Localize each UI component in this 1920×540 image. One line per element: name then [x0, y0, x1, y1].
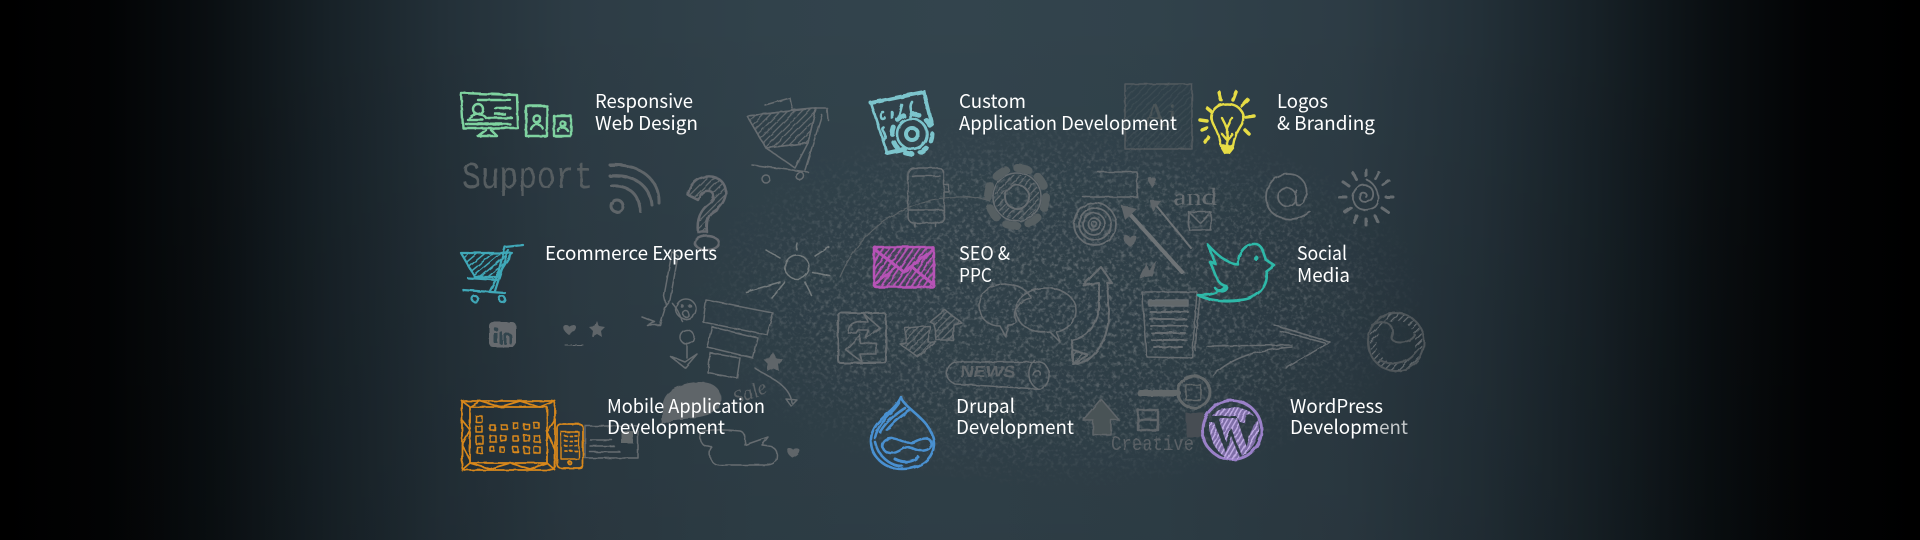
label: Development: [1290, 413, 1408, 440]
label: PPC: [959, 261, 992, 288]
service: logos and branding: [1200, 87, 1375, 153]
doodle: open box: [1083, 172, 1137, 197]
icon: teal shopping cart: [461, 245, 523, 302]
doodle: spiral sun: [1339, 170, 1393, 225]
doodle: long arrow: [1207, 325, 1330, 375]
label: [1297, 239, 1350, 288]
label: Drupal: [956, 392, 1015, 419]
label: Ecommerce Experts: [545, 239, 717, 266]
label: [959, 239, 1010, 288]
doodle: info card: [585, 426, 638, 458]
doodle: document: [1142, 292, 1200, 358]
service: ecommerce experts: [461, 239, 717, 302]
doodle: sun: [746, 243, 830, 298]
doodle: pen: [642, 252, 682, 325]
label: [595, 87, 698, 136]
icon: purple envelope: [874, 247, 934, 287]
icon: monitor tablet phone: [461, 93, 571, 136]
doodle: arrows box: [838, 313, 886, 363]
doodle: grey shopping cart: [747, 98, 828, 183]
doodle: news roll: [947, 360, 1049, 389]
doodle: news roll: NEWS: [959, 363, 1017, 381]
label: Application Development: [959, 109, 1177, 136]
doodle: RSS icon: [610, 165, 659, 212]
service: social media: [1198, 239, 1350, 301]
label: [1290, 392, 1408, 440]
doodle: gear: [988, 168, 1046, 226]
doodle: Ai box: Ai: [1143, 97, 1177, 134]
doodle: speech bubbles: [979, 284, 1076, 342]
service: drupal development: [871, 392, 1074, 469]
label: [607, 392, 765, 440]
doodle: at sign: [1266, 174, 1310, 219]
doodle: filled speech bubble: [662, 382, 721, 424]
doodle: device: [908, 168, 949, 227]
label: Responsive: [595, 87, 693, 114]
doodle: heart low: [787, 448, 800, 458]
icon: code sheet and gear: [871, 92, 932, 154]
service: seo and ppc: [874, 239, 1010, 288]
doodle: film box: [1138, 410, 1158, 430]
doodle: globe: [1368, 313, 1424, 371]
service: mobile application development: [462, 392, 765, 470]
label: WordPress: [1290, 392, 1383, 419]
label: [956, 392, 1074, 440]
doodle: dark square: [1186, 413, 1204, 437]
doodle: concentric spiral: [1074, 203, 1116, 245]
icon: drupal drop: [871, 397, 934, 469]
label: Custom: [959, 87, 1026, 114]
label: Development: [956, 413, 1074, 440]
doodle: and: and: [1173, 185, 1217, 211]
label: [1277, 87, 1375, 136]
service: wordpress development: [1202, 392, 1408, 460]
doodle: Creative word: Creative: [1111, 434, 1194, 457]
doodle: small envelope: [1189, 212, 1211, 230]
doodle: up arrow: [1083, 399, 1119, 435]
doodle: Support word: Support: [462, 157, 593, 200]
label: SEO &: [959, 239, 1010, 266]
doodle: arc: [840, 197, 990, 277]
label: Mobile Application: [607, 392, 765, 419]
label: Web Design: [595, 109, 698, 136]
label: Media: [1297, 261, 1350, 288]
icon: wordpress logo: [1202, 400, 1262, 460]
doodle: up down arrows: [900, 310, 962, 357]
doodle: Ai box: [1125, 84, 1192, 149]
doodle: magnifier: [1140, 376, 1210, 408]
label: [959, 87, 1177, 136]
doodle: diagonal arrows: [1121, 200, 1191, 278]
doodle: star and curved arrow: [755, 352, 797, 406]
doodle: question mark: [688, 176, 726, 250]
label: & Branding: [1277, 109, 1375, 136]
doodle: heart and star: [563, 321, 605, 345]
service: responsive web design: [461, 87, 698, 136]
doodle: small heart: [1148, 177, 1156, 187]
label: Development: [607, 413, 725, 440]
doodle: stacked boxes: [703, 300, 773, 378]
doodle: face: [676, 299, 696, 319]
doodle: sale: Sale: [730, 376, 770, 410]
doodle: curved up arrow: [1072, 267, 1112, 364]
doodle: linkedin: [489, 322, 516, 347]
background chalk doodles: [462, 84, 1424, 465]
label: Logos: [1277, 87, 1328, 114]
service: custom application development: [871, 87, 1177, 154]
icon: orange tablet and phone: [462, 401, 583, 470]
icon: twitter bird: [1198, 244, 1274, 301]
doodle: flower and check: [670, 330, 697, 368]
icon: light bulb: [1200, 92, 1254, 153]
chalk dust texture: [725, 129, 1398, 474]
label: Social: [1297, 239, 1347, 266]
doodle: lower bubble: [700, 430, 777, 465]
